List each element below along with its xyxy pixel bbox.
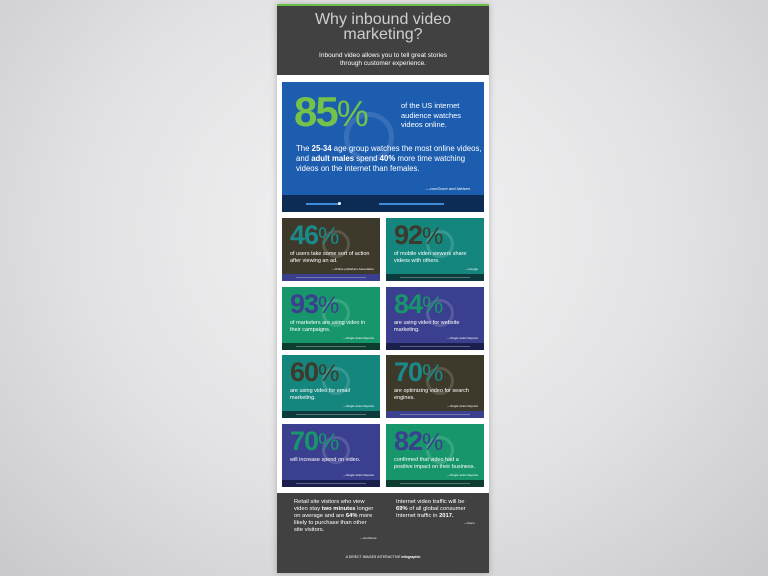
card 92: 92% [394, 220, 442, 250]
card 60: —Single Grain Reports [343, 404, 374, 408]
card 70 search: 70% [394, 357, 442, 387]
card 82: 82% [394, 426, 442, 456]
card 46: of users take some sort of action after viewing an ad. [290, 251, 369, 264]
footer left text: Retail site visitors who view video stay two minutes longer on average and are 64% more likely to purchase than other site visitors. [294, 499, 373, 533]
card 84: —Single Grain Reports [447, 336, 478, 340]
card 70 spend: —Single Grain Reports [343, 473, 374, 477]
video bar [282, 195, 484, 212]
title [315, 11, 451, 43]
card 82: —Single Grain Reports [447, 473, 478, 477]
infographic panel [277, 4, 489, 573]
card 93: —Single Grain Reports [343, 336, 374, 340]
subtitle: Inbound video allows you to tell great stories [319, 52, 447, 59]
hero card 85% [282, 82, 484, 212]
card 70 search: —Single Grain Reports [447, 404, 478, 408]
card 93: of marketers are using video in their campaigns. [290, 320, 365, 333]
stat text: audience watches [401, 110, 461, 120]
footer: —comScore [360, 536, 377, 540]
card 70 spend [282, 424, 380, 487]
card 46: 46% [290, 220, 338, 250]
stat text: videos online. [401, 120, 447, 129]
credit: A DIRECT IMAGES INTERACTIVE infographic [346, 555, 420, 559]
card 70 search: are optimizing video for search engines. [394, 388, 469, 401]
card 70 spend: 70% [290, 426, 338, 456]
card 93 [282, 287, 380, 350]
card 92 [386, 218, 484, 281]
footer [277, 493, 489, 573]
subtitle [319, 52, 447, 67]
card 70 spend: will increase spend on video. [290, 457, 360, 463]
card 60: 60% [290, 357, 338, 387]
card 60: are using video for email marketing. [290, 388, 350, 401]
card 84: are using video for website marketing. [394, 320, 459, 333]
big stat: 85% [294, 88, 367, 135]
card 46: —Online publishers Association [332, 267, 374, 271]
stat text: of the US internet [401, 101, 459, 110]
title: Why inbound video [315, 11, 451, 28]
card 46 [282, 218, 380, 281]
description: The 25-34 age group watches the most online videos, and adult males spend 40% more time watching videos on the internet than females. [296, 144, 482, 173]
footer right text: Internet video traffic will be 69% of all global consumer Internet traffic in 2017. [396, 499, 466, 519]
header [277, 4, 489, 75]
card 70 search [386, 355, 484, 418]
card 84: 84% [394, 289, 442, 319]
card 92: of mobile video viewers share videos with others. [394, 251, 466, 264]
subtitle: through customer experience. [340, 60, 426, 67]
stat text [401, 101, 461, 129]
card 93: 93% [290, 289, 338, 319]
card 92: —Google [465, 267, 478, 271]
title: marketing? [343, 26, 423, 43]
card 84 [386, 287, 484, 350]
card 82: confirmed that video had a positive impact on their business. [394, 457, 475, 470]
source: —comScore and Nielsen [426, 186, 470, 191]
footer: —Cisco [464, 521, 475, 525]
card 82 [386, 424, 484, 487]
card 60 [282, 355, 380, 418]
